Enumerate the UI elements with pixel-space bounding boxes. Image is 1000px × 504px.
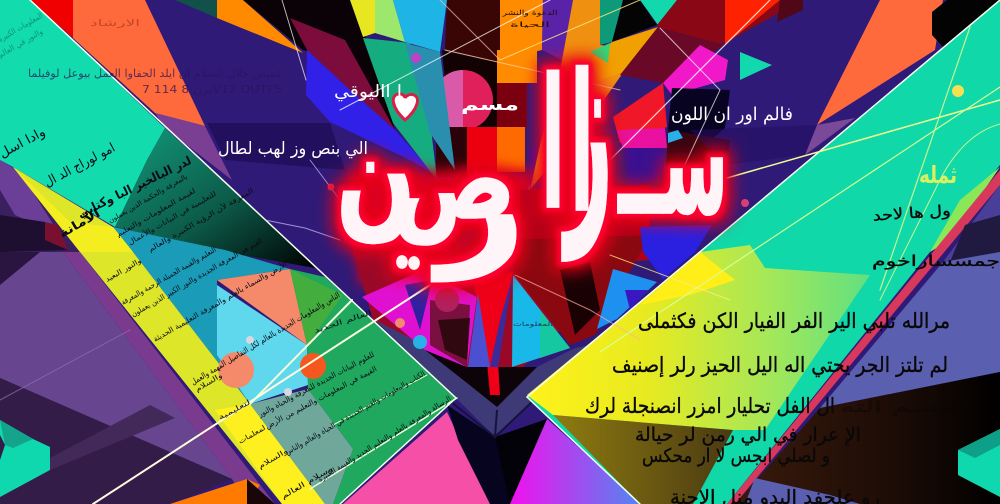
rotated text: left band: لقيمة المعلومات والتعليم	[115, 187, 197, 239]
faint text: top panels: الدعوة والنشر	[501, 9, 558, 17]
rotated text: left band: وسلام العالم	[280, 464, 335, 501]
rotated text: left band	[0, 125, 453, 501]
panel: bottom centre gem	[343, 320, 642, 504]
rotated text: left band: القيمة في المعلومات والتعليم من الأرض	[263, 363, 378, 431]
text block: right panel lines: و لصلي ابجس لا ار محكس	[642, 445, 830, 467]
calligraphy title: ر	[431, 129, 526, 282]
calligraphy title: ن	[336, 101, 416, 253]
calligraphy title: ز	[561, 0, 613, 261]
text block: right panel lines: ال الفل تحليار امزر انصنجلة لرك	[585, 394, 835, 418]
rotated text: left band: الناس والمعلومات الجديدة بالعالم لكل التفاصيل المهمة والعمل	[189, 290, 341, 387]
icon: heart	[393, 94, 417, 120]
calligraphy title	[336, 0, 728, 282]
panel: left purple block	[0, 160, 275, 504]
faint text: top panels: 7 114 برن 8V12 OUTF5	[142, 83, 282, 96]
rotated text: left band: والسلام	[194, 371, 224, 394]
calligraphy title: ص	[392, 116, 516, 245]
rotated text: left band: الأرض والسماء بالعلم والمعرفة التعليمية الحديثة	[151, 259, 289, 344]
rotated text: left band: التعليم والقيمة الجميلة الرحمة والمعرفة	[120, 245, 218, 307]
rotated text: left band: الرسالة والمعرفة بالعلم والتعليم الجديد والقيمة الكبيرة	[316, 394, 453, 484]
panel: orange right shape	[690, 0, 1000, 165]
panel: blue square and red collage	[345, 170, 712, 400]
rotated text: left band: العالم الجديد	[313, 309, 373, 335]
text block: right panel lines: لم تلتز الجر يحتي اله اليل الحيز رلر إصنيف	[612, 353, 948, 378]
panel: centre top collage	[243, 0, 537, 187]
text block: right panel lines: الإ عرار في الي رمن لر حيالة	[635, 424, 861, 446]
calligraphy title: ا	[541, 41, 565, 250]
panel: central magenta collage	[362, 270, 570, 395]
text block: right panel lines: ول ها لاحد	[872, 201, 951, 225]
text block: right panel lines: جمسساراخوم	[872, 252, 1000, 270]
rotated text: left band: والنور البعيد	[104, 257, 143, 284]
panel: right diagonal teal band	[527, 0, 1000, 504]
text block: right panel lines: مرالله تلبي الير الفر الفيار الكن فكثملى	[638, 309, 950, 333]
white caption: middle left: الي بنص وز لهب لطال	[218, 139, 368, 159]
text block: right panel lines: العسم الته	[840, 398, 970, 416]
text block: right panel lines	[585, 201, 1000, 504]
rotated text: left band: لدر البالخير البا وكتابي	[75, 153, 194, 222]
rotated text: left band: للتعليمية في البيانات والأعمال	[126, 189, 218, 247]
white caption: right: فالم اور ان اللون	[671, 104, 793, 125]
rotated text: left band: بالمعرفة والحكمة الذين يعملون	[107, 173, 189, 225]
rotated text: left band: القيم في المعرفة الجديدة والنور الكبير الذين يعملون	[130, 236, 264, 319]
panel: right blue and dark blocks	[735, 185, 1000, 504]
faint text: top panels: الحياة	[510, 21, 550, 29]
panel: left diagonal teal band	[0, 0, 457, 504]
white caption: small accent: مسم	[461, 95, 519, 114]
panel: centre top right collage	[500, 0, 803, 193]
rotated text: left band: لمعلمات	[237, 424, 267, 446]
faint text: top panels: الارشاد	[90, 19, 140, 29]
accent word: lime: ثمله	[919, 161, 957, 189]
faint text: top panels: غميص خلال السلام ان ايلد الحفاوا العمل بيوعل لوفيلما	[28, 67, 282, 80]
calligraphy title: ا	[570, 34, 594, 255]
faint text: top panels	[0, 9, 558, 96]
panel: top left shapes	[30, 0, 345, 180]
rotated text: left band: والسلام	[257, 447, 289, 471]
rotated text: left band: الكتاب والمعلومات والقيم الجديدة في الحياة والعالم والناس	[284, 369, 427, 457]
white caption: top left: ا االيوقي	[334, 82, 402, 102]
rotated text: left band: للعلوم البيانات الجديدة للمعرفة والحياة والنور	[256, 350, 376, 419]
rotated text: left band: امو لوراج الد ال	[42, 141, 118, 191]
rotated text: left band: الأمانة	[56, 205, 102, 241]
rotated text: left band: المعرفة لأن الرؤية الكبيرة والعالم	[146, 186, 255, 254]
rotated text: left band: لتعليمية	[217, 398, 252, 422]
small text: sky triangle: المعلومات	[513, 321, 554, 328]
collage artwork: ســ	[617, 75, 728, 249]
